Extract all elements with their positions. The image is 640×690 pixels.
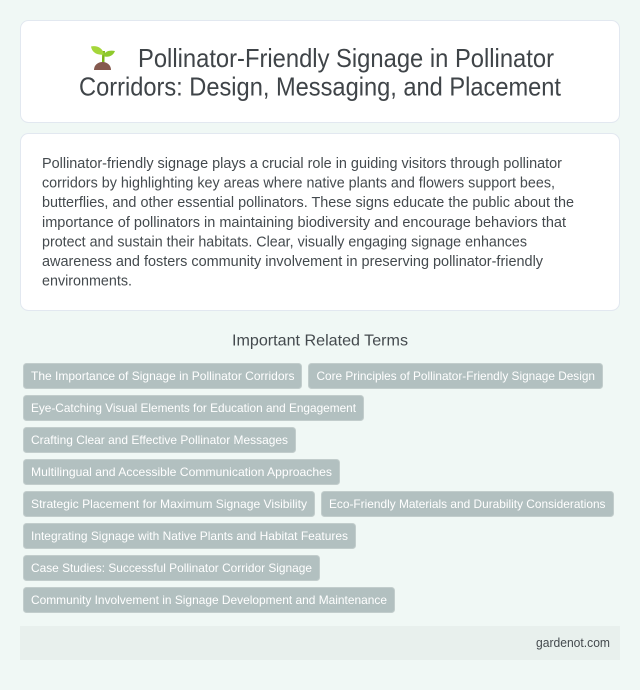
title: Corridors: Design, Messaging, and Placement	[79, 74, 561, 102]
tag: Eco-Friendly Materials and Durability Considerations	[329, 497, 606, 511]
text block: introduction paragraph: Pollinator-friendly signage plays a crucial role in guiding visitors through pollinator	[42, 156, 562, 172]
tag	[24, 492, 314, 516]
text block: introduction paragraph: importance of pollinators in maintaining biodiversity and encourage behaviors that	[42, 215, 566, 231]
tag: Eye-Catching Visual Elements for Education and Engagement	[31, 401, 357, 415]
tag	[24, 588, 394, 612]
text block: introduction paragraph: corridors by highlighting key areas where native plants and flowers support bees,	[42, 176, 555, 192]
tag	[322, 492, 614, 516]
tag: Multilingual and Accessible Communication Approaches	[31, 465, 332, 479]
tag	[24, 524, 356, 548]
title: Pollinator-Friendly Signage in Pollinator	[138, 45, 554, 73]
tag: Crafting Clear and Effective Pollinator Messages	[31, 433, 288, 447]
tag	[24, 364, 302, 388]
title	[79, 45, 561, 102]
text block: introduction paragraph: environments.	[42, 274, 132, 290]
tag: Case Studies: Successful Pollinator Corridor Signage	[31, 561, 312, 575]
tag	[24, 556, 320, 580]
tag	[24, 428, 296, 452]
tag: The Importance of Signage in Pollinator Corridors	[31, 369, 294, 383]
text block: introduction paragraph: butterflies, and other essential pollinators. These signs educate the public about the	[42, 195, 574, 211]
heading: related terms: Important Related Terms	[232, 332, 408, 350]
text block: introduction paragraph: awareness and fosters community involvement in preserving pollinator-friendly	[42, 254, 544, 270]
tag: Community Involvement in Signage Development and Maintenance	[31, 593, 387, 607]
tag	[308, 364, 602, 388]
tag: Integrating Signage with Native Plants and Habitat Features	[31, 529, 348, 543]
text block: introduction paragraph	[42, 156, 574, 290]
footer source text: gardenot.com	[536, 635, 610, 650]
panel: introduction	[20, 134, 620, 310]
tag	[24, 460, 340, 484]
tag: Core Principles of Pollinator-Friendly Signage Design	[316, 369, 595, 383]
text block: introduction paragraph: protect and sustain their habitats. Clear, visually engaging signage enhances	[42, 234, 527, 250]
tag: Strategic Placement for Maximum Signage Visibility	[31, 497, 307, 511]
panel: title card	[20, 20, 620, 122]
icon: seedling	[91, 46, 115, 70]
tag	[24, 396, 364, 420]
footer	[20, 626, 620, 660]
tag list: related terms	[24, 364, 614, 612]
